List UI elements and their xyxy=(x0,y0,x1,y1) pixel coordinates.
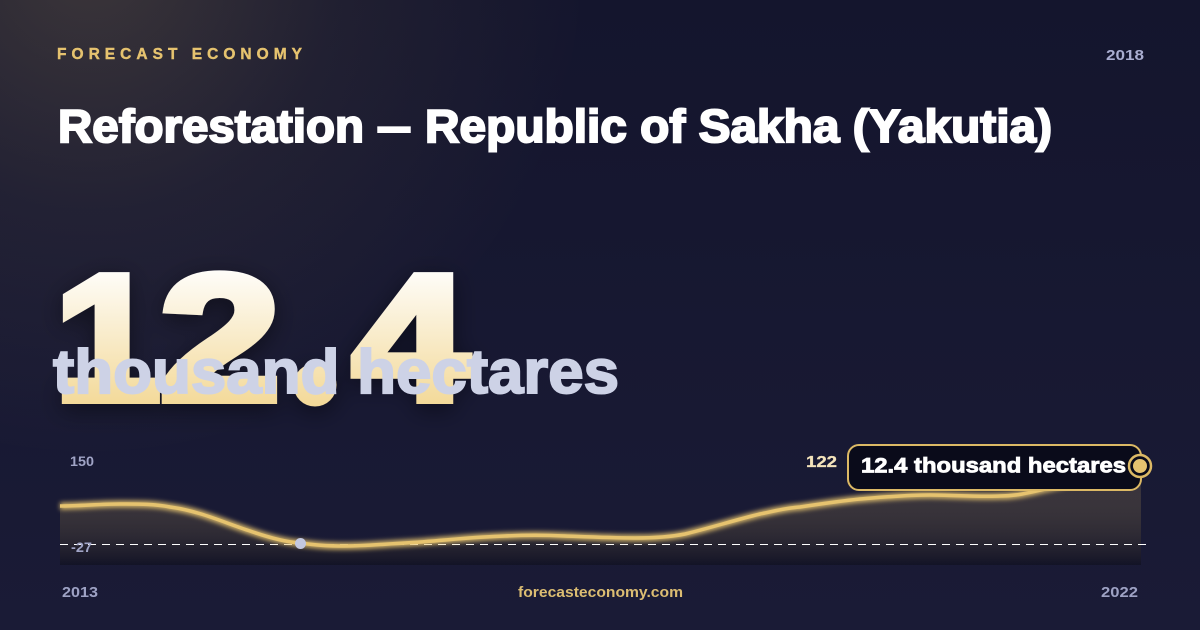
unit label: thousand hectares xyxy=(53,338,619,407)
data line xyxy=(60,466,1141,546)
callout: 12.4 thousand hectares xyxy=(861,454,1126,478)
start year: 2013 xyxy=(62,584,98,601)
title: Republic of Sakha (Yakutia) xyxy=(425,100,1052,152)
source url: forecasteconomy.com xyxy=(518,584,683,601)
big value: 2 xyxy=(159,238,281,439)
peak value label: 122 xyxy=(806,454,837,471)
title: Reforestation xyxy=(58,100,364,152)
reference dashed line xyxy=(60,544,1146,546)
line glow xyxy=(60,466,1141,546)
big value: 4 xyxy=(352,238,469,439)
line chart xyxy=(60,466,1146,565)
title: — xyxy=(378,100,410,152)
chart area fill xyxy=(60,466,1141,565)
end year: 2022 xyxy=(1101,584,1138,601)
axis max label: 150 xyxy=(70,454,94,469)
marker: latest point xyxy=(1129,455,1151,477)
callout xyxy=(848,445,1141,490)
big value xyxy=(54,238,469,439)
minimum point xyxy=(295,538,306,549)
big value: 1 xyxy=(54,238,161,439)
year label: 2018 xyxy=(1106,47,1144,64)
axis min label: -27 xyxy=(71,540,92,555)
brand label: FORECAST ECONOMY xyxy=(57,46,303,63)
title xyxy=(58,100,1052,152)
